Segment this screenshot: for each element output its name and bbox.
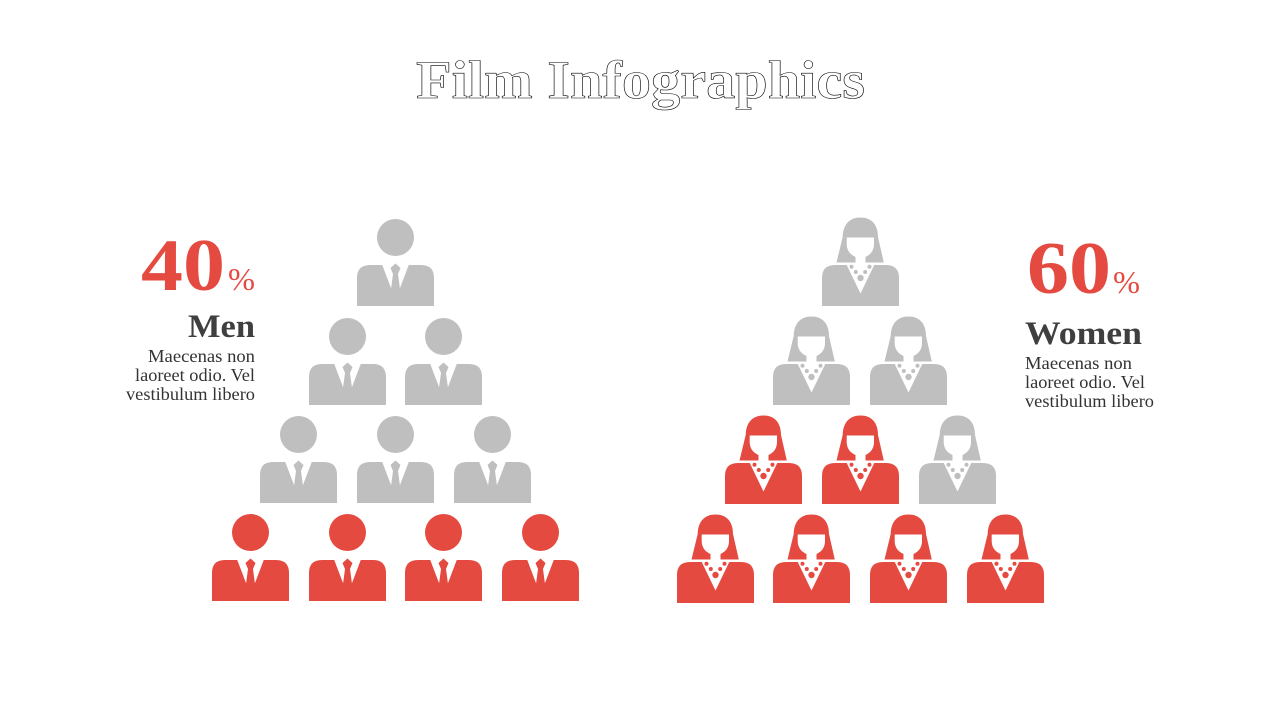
chart: men pictogram pyramid <box>212 219 579 601</box>
women percentage <box>1027 228 1140 310</box>
men description: laoreet odio. Vel <box>135 365 255 385</box>
panel: men statistics <box>126 225 255 404</box>
women description <box>1025 353 1154 411</box>
panel: women statistics <box>1025 228 1154 411</box>
title: Film Infographics <box>416 50 865 110</box>
women description: Maecenas non <box>1025 353 1132 373</box>
women description: vestibulum libero <box>1025 391 1154 411</box>
men description: vestibulum libero <box>126 384 255 404</box>
women percentage: % <box>1113 264 1140 300</box>
women description: laoreet odio. Vel <box>1025 372 1145 392</box>
men description <box>126 346 255 404</box>
men description: Maecenas non <box>148 346 255 366</box>
men heading: Men <box>188 309 255 345</box>
women heading: Women <box>1025 316 1142 352</box>
men percentage <box>141 225 255 307</box>
women percentage: 60 <box>1027 228 1111 310</box>
men percentage: % <box>228 261 255 297</box>
chart: women pictogram pyramid <box>677 218 1044 603</box>
men percentage: 40 <box>141 225 225 307</box>
